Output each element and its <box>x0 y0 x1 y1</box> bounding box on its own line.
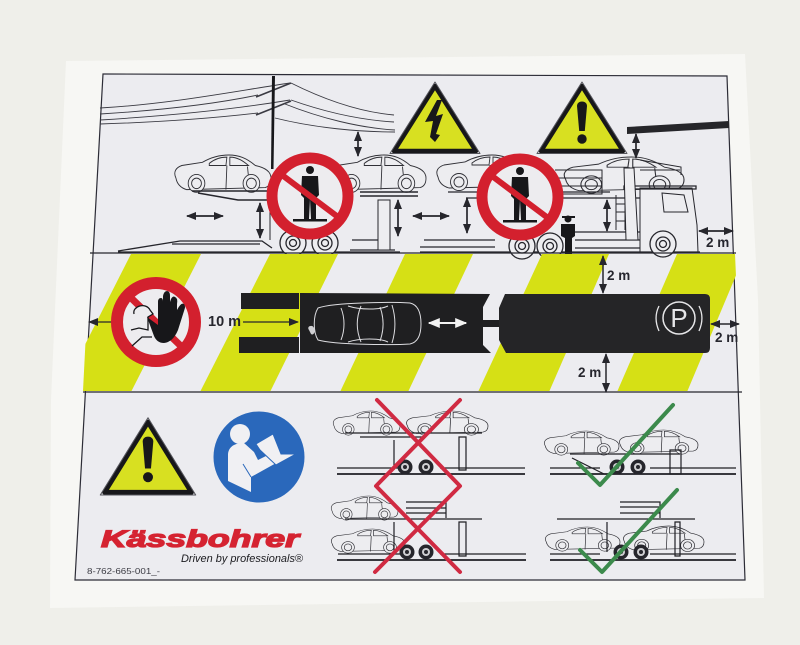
car on trailer 1, rear <box>175 155 271 192</box>
trailer 1 upper deck <box>192 191 418 200</box>
loading rails over truck car <box>555 160 681 194</box>
icon: parking brake <box>656 302 702 334</box>
trailer 1 rear wheel <box>312 230 338 256</box>
icon: electric hazard triangle <box>390 82 480 154</box>
truck ladder <box>616 195 625 230</box>
cab wheel <box>650 231 676 257</box>
wrong loading example 1 <box>333 411 525 474</box>
panel: safety zone <box>61 254 745 392</box>
safety sticker illustration <box>50 54 764 608</box>
panel dividers <box>83 253 742 392</box>
trailer 1 lower deck and ramp <box>118 240 400 252</box>
icon: no persons sign left <box>272 158 348 234</box>
2 m label bottom: 2 m <box>578 365 601 380</box>
black loading area, car section <box>300 293 500 353</box>
truck pillar <box>624 168 638 240</box>
logo tagline: Driven by professionals® <box>181 553 304 565</box>
overhead beam <box>627 121 729 134</box>
white double arrow <box>429 322 466 324</box>
icon: warning triangle lower <box>100 418 196 495</box>
distance label: cab to edge: 2 m <box>706 235 729 250</box>
white backing sheet <box>50 54 764 608</box>
car on trailer 2 <box>437 155 535 190</box>
truck cab <box>640 188 698 252</box>
signal waves at car rear <box>308 326 315 335</box>
icon: general warning triangle <box>537 82 627 154</box>
truck wheels <box>509 233 535 259</box>
cab window <box>662 193 688 212</box>
car seen from above <box>314 303 421 345</box>
black loading area, parking section <box>499 294 710 353</box>
lane divider bars <box>239 293 299 353</box>
label frame <box>75 74 745 580</box>
logo wordmark: Kässbohrer <box>101 526 301 553</box>
icon: no persons sign right <box>482 159 558 235</box>
power lines <box>100 83 395 132</box>
10 m label: 10 m <box>208 314 241 330</box>
trailer 1 wheels <box>280 230 306 256</box>
clearance arrows <box>187 132 733 238</box>
icon: no unauthorised access <box>117 283 195 361</box>
panel: top height and clearance hazards <box>100 76 733 259</box>
2 m arrows <box>603 256 739 392</box>
icon: read the manual <box>214 412 304 502</box>
icon: parking brake: P <box>670 303 688 333</box>
2 m label top: 2 m <box>607 268 630 283</box>
panel: instructions and correct loading <box>87 400 736 576</box>
trailer 1 pillars <box>270 195 390 250</box>
icon: truck driver figure <box>561 216 575 255</box>
hatched yellow stripes <box>61 254 745 392</box>
correct loading example 2 <box>545 502 736 560</box>
green check mark top <box>578 405 673 485</box>
utility pole <box>271 76 275 169</box>
truck upper deck <box>448 186 696 198</box>
10 m exclusion arrows <box>89 321 298 323</box>
truck lower deck <box>420 232 700 252</box>
truck middle wheel <box>537 233 563 259</box>
part number: 8-762-665-001_- <box>87 566 160 576</box>
green check mark bottom <box>580 490 677 572</box>
wrong loading example 2 <box>331 496 526 560</box>
2 m label right: 2 m <box>715 330 738 345</box>
correct loading example 1 <box>544 430 736 474</box>
car on trailer 1, front <box>330 155 426 192</box>
red cross marks <box>375 400 460 572</box>
car on truck <box>564 157 684 193</box>
